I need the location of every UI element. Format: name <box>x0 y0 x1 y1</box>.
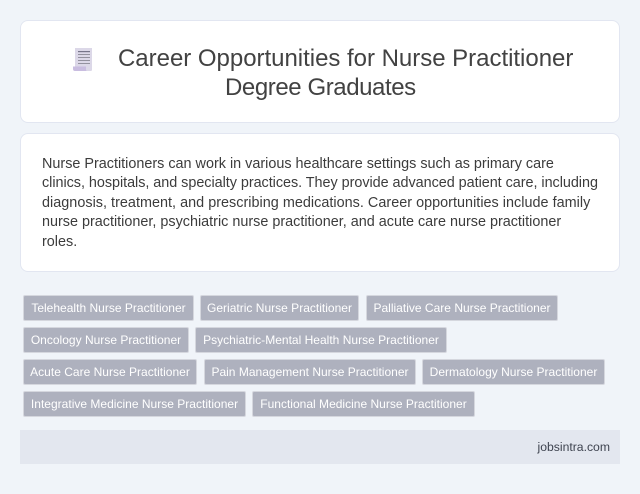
tag <box>195 327 447 353</box>
tag: Functional Medicine Nurse Practitioner <box>260 397 467 411</box>
tag: Geriatric Nurse Practitioner <box>207 301 352 315</box>
text: description <box>42 156 598 250</box>
tag <box>23 327 189 353</box>
footer: source credit: jobsintra.com <box>538 440 610 454</box>
text: description: nurse practitioner, psychiatric nurse practitioner, and acute care nurse practitioner <box>42 214 561 230</box>
text: description: diagnosis, treatment, and prescribing medications. Career opportunities include family <box>42 195 590 211</box>
tag <box>422 359 605 385</box>
tag <box>23 295 194 321</box>
tag <box>23 391 246 417</box>
tag: Acute Care Nurse Practitioner <box>30 365 190 379</box>
tag: Pain Management Nurse Practitioner <box>211 365 409 379</box>
tag: Integrative Medicine Nurse Practitioner <box>31 397 238 411</box>
footer bar <box>20 430 620 464</box>
tag: Oncology Nurse Practitioner <box>31 333 181 347</box>
tag list <box>23 295 605 417</box>
heading: line 2: Degree Graduates <box>225 74 416 101</box>
tag: Palliative Care Nurse Practitioner <box>373 301 551 315</box>
icon: document scroll <box>73 48 92 71</box>
tag: Dermatology Nurse Practitioner <box>430 365 597 379</box>
panel: title card <box>20 20 620 123</box>
tag <box>366 295 558 321</box>
tag: Psychiatric-Mental Health Nurse Practitioner <box>203 333 439 347</box>
tag <box>23 359 197 385</box>
panel: description card <box>20 133 620 272</box>
tag <box>200 295 359 321</box>
text: description: Nurse Practitioners can work in various healthcare settings such as primary care <box>42 156 554 172</box>
tag: Telehealth Nurse Practitioner <box>31 301 186 315</box>
text: description: clinics, hospitals, and specialty practices. They provide advanced patient care, including <box>42 175 598 191</box>
tag <box>204 359 416 385</box>
text: description: roles. <box>42 234 77 250</box>
tag <box>252 391 475 417</box>
heading: line 1: Career Opportunities for Nurse Practitioner <box>118 45 573 72</box>
